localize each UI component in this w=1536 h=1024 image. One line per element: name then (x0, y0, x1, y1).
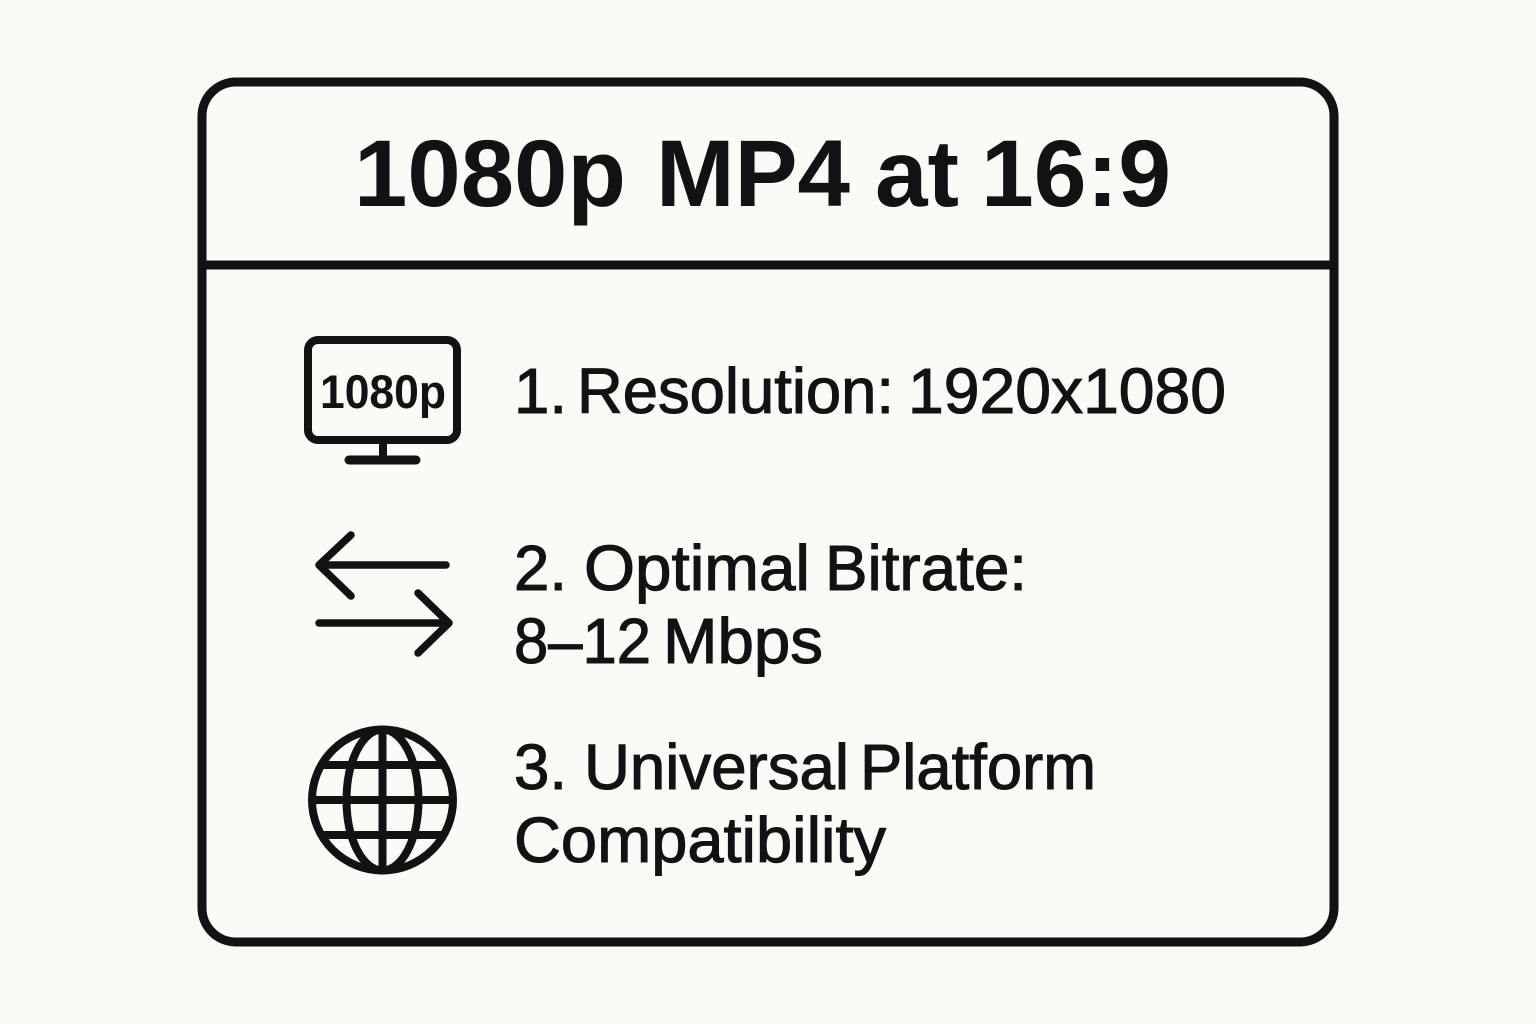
icon: monitor 1080p (308, 340, 457, 460)
text: resolution: 1. (514, 355, 567, 427)
text: platform compatibility: Universal (584, 731, 849, 803)
text: resolution: 1920x1080 (908, 355, 1226, 427)
icon: bitrate arrows (319, 535, 449, 653)
title: MP4 (656, 121, 850, 227)
text: optimal bitrate: Optimal (584, 532, 810, 604)
icon: globe (312, 730, 453, 870)
text: optimal bitrate: Mbps (663, 605, 823, 677)
text: optimal bitrate (514, 532, 1027, 677)
text: optimal bitrate: 2. (514, 532, 567, 604)
text: platform compatibility: Platform (860, 731, 1096, 803)
text: optimal bitrate: Bitrate: (825, 532, 1027, 604)
title: at (875, 121, 959, 227)
title: 1080p (354, 121, 626, 227)
text: platform compatibility: Compatibility (514, 804, 886, 876)
text: platform compatibility: 3. (514, 731, 567, 803)
text: platform compatibility (514, 731, 1096, 876)
text: optimal bitrate: 8–12 (514, 605, 651, 677)
text: resolution: Resolution: (577, 355, 894, 427)
icon: monitor 1080p: 1080p (320, 365, 446, 418)
title: 16:9 (981, 121, 1171, 227)
panel: spec card (202, 82, 1334, 942)
